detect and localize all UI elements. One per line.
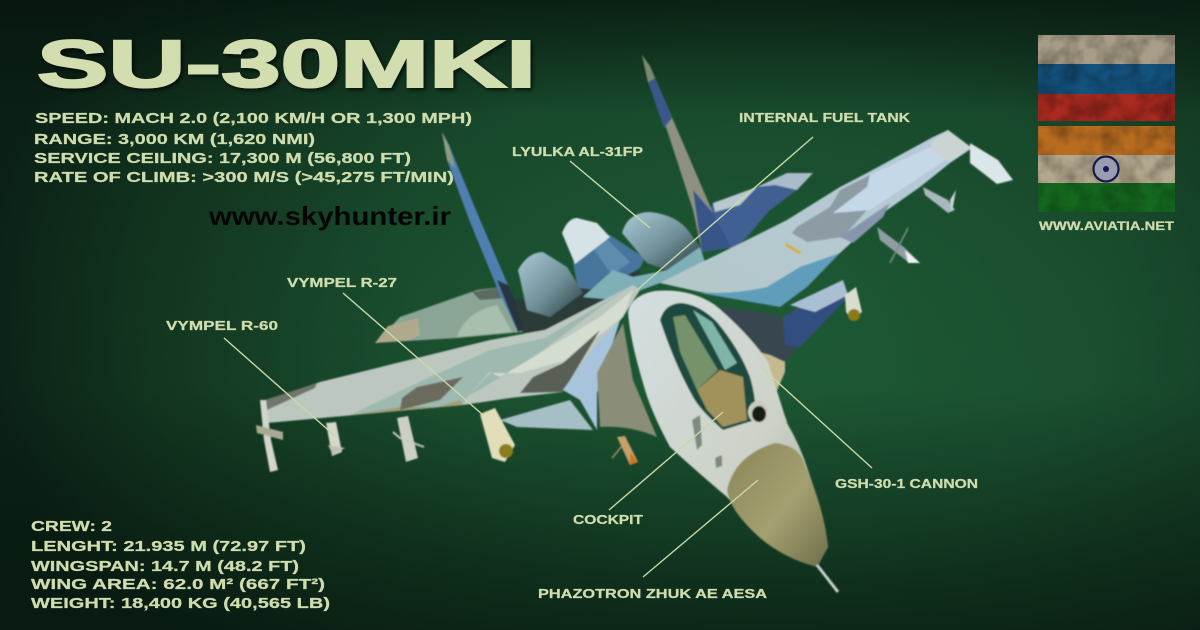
source url: WWW.AVIATIA.NET xyxy=(1039,221,1174,233)
flag: Russia xyxy=(1038,35,1175,121)
label: internal fuel tank: INTERNAL FUEL TANK xyxy=(739,111,910,125)
performance specs: RATE OF CLIMB: >300 M/S (>45,275 FT/MIN) xyxy=(34,169,454,186)
right vertical tail xyxy=(642,55,732,252)
performance specs: SPEED: MACH 2.0 (2,100 KM/H OR 1,300 MPH) xyxy=(35,110,472,127)
watermark url: www.skyhunter.ir xyxy=(208,201,451,231)
pitot probe xyxy=(817,565,838,592)
right wing missiles xyxy=(845,143,1013,321)
radome xyxy=(727,443,828,567)
dimension specs: WING AREA: 62.0 M² (667 FT²) xyxy=(31,576,325,593)
label: vympel r-60: VYMPEL R-60 xyxy=(166,319,278,333)
left wing inner panel xyxy=(500,400,593,430)
aircraft xyxy=(256,55,1013,592)
dimension specs xyxy=(31,518,330,612)
dimension specs: WINGSPAN: 14.7 M (48.2 FT) xyxy=(31,558,299,575)
canopy xyxy=(660,303,768,430)
label: radar: PHAZOTRON ZHUK AE AESA xyxy=(538,587,767,601)
flag: India xyxy=(1038,126,1175,212)
label: lyulka engine: LYULKA AL-31FP xyxy=(512,145,643,159)
left vertical tail xyxy=(442,132,529,332)
left wing xyxy=(262,280,640,423)
central intake xyxy=(563,320,657,437)
left rear stabilizer xyxy=(375,287,522,343)
performance specs xyxy=(34,110,472,186)
performance specs: SERVICE CEILING: 17,300 M (56,800 FT) xyxy=(34,150,411,167)
right wing xyxy=(660,130,972,293)
engines xyxy=(515,212,705,335)
dimension specs: LENGHT: 21.935 M (72.97 FT) xyxy=(31,538,306,555)
gun housing xyxy=(742,348,788,423)
fuselage markings xyxy=(692,415,722,468)
belly missile xyxy=(612,436,638,465)
label: cockpit: COCKPIT xyxy=(573,513,643,527)
callout lines xyxy=(224,137,872,577)
lower right wing section xyxy=(700,253,848,365)
fuselage nose xyxy=(628,291,828,567)
title: SU-30MKI xyxy=(37,27,536,102)
performance specs: RANGE: 3,000 KM (1,620 NMI) xyxy=(34,131,315,148)
dimension specs: WEIGHT: 18,400 KG (40,565 LB) xyxy=(31,595,330,612)
label: cannon: GSH-30-1 CANNON xyxy=(835,477,978,491)
label: vympel r-27: VYMPEL R-27 xyxy=(287,276,397,290)
dimension specs: CREW: 2 xyxy=(31,518,112,535)
left wing missiles xyxy=(256,400,515,472)
right rear stabilizer xyxy=(700,173,813,250)
